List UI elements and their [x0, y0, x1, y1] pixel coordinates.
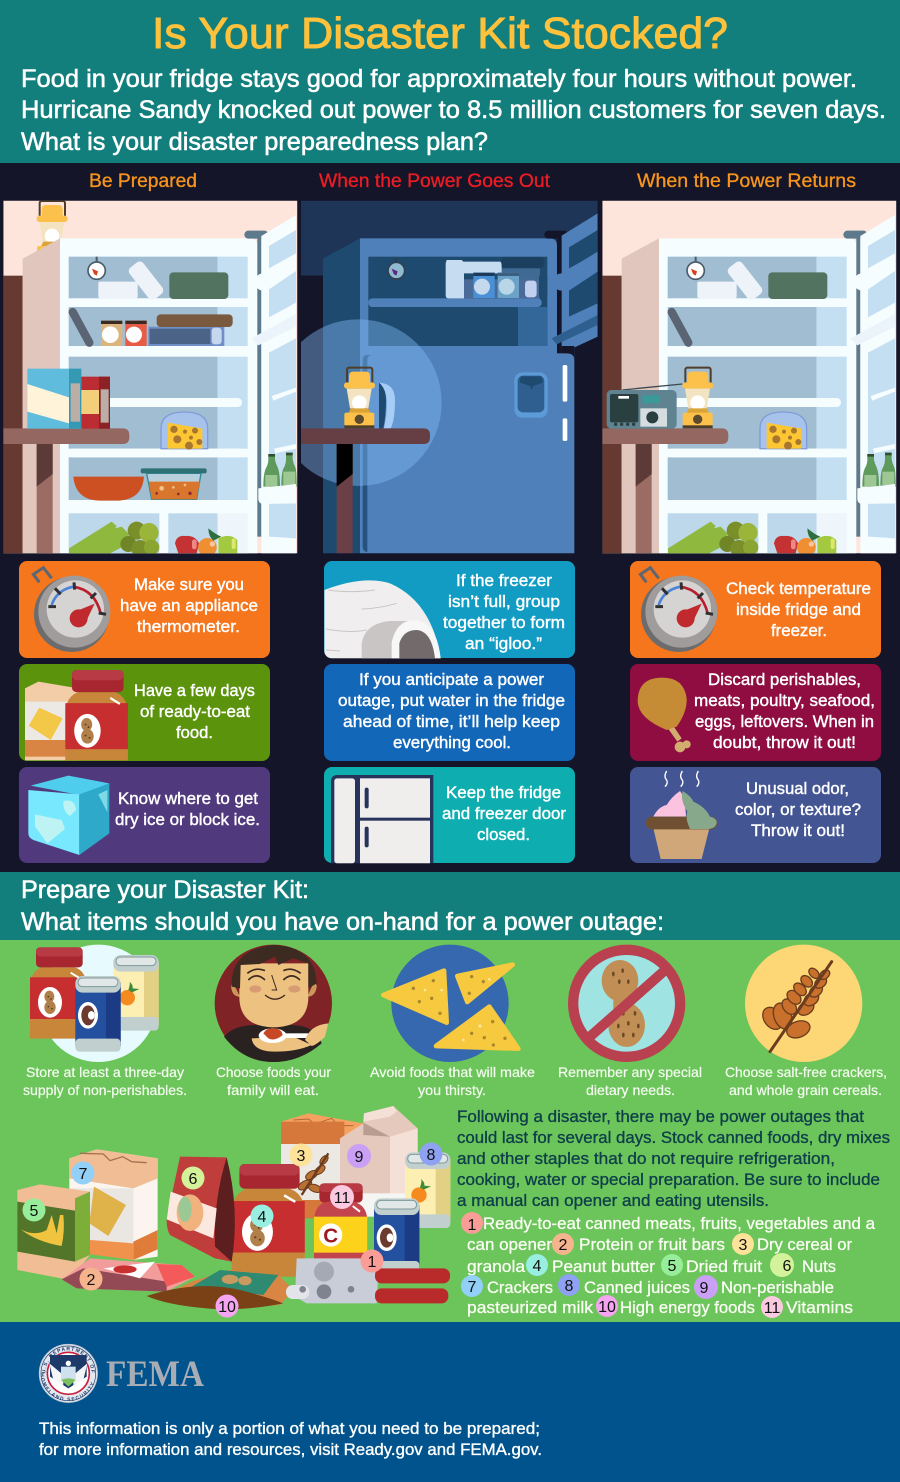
- logo: FEMA: FEMA: [106, 1354, 204, 1395]
- card: unusual odor: color, or texture?: [735, 801, 861, 819]
- card: ready-to-eat food: Have a few days: [134, 682, 255, 700]
- item: milk carton: [340, 1106, 418, 1217]
- badges on kit items: [22, 1142, 442, 1318]
- text block: kit description: [457, 1107, 890, 1210]
- legend: kit items key: 1: [468, 1217, 477, 1234]
- card: keep door closed: Keep the fridge: [446, 784, 561, 802]
- icon: non-perishables: [30, 945, 159, 1062]
- illustration: stocked fridge open: [3, 201, 297, 557]
- panel: tip cards column 1: [19, 561, 270, 863]
- item: crackers box: [69, 1149, 158, 1260]
- card: ready-to-eat food: of ready-to-eat: [140, 703, 250, 721]
- badges on kit items: 7: [79, 1166, 88, 1183]
- icon: salty chips: [383, 945, 518, 1062]
- intro text: Food in your fridge stays good for approximately four hours without power.: [21, 65, 857, 93]
- card: check temperature: Check temperature: [726, 580, 871, 598]
- badges on kit items: 10: [218, 1299, 236, 1316]
- badges on kit items: 1: [368, 1254, 377, 1271]
- card: check temperature: freezer.: [771, 622, 827, 640]
- card: discard perishables: doubt, throw it out!: [713, 734, 856, 752]
- card: discard perishables: eggs, leftovers. When in: [695, 713, 874, 731]
- card: check temperature: inside fridge and: [736, 601, 861, 619]
- item: peanut butter jar: [232, 1164, 305, 1277]
- card: unusual odor: Unusual odor,: [746, 780, 849, 798]
- card: dry ice: [19, 767, 270, 863]
- panel: tip cards column 3: [630, 561, 881, 863]
- intro text: [21, 65, 886, 156]
- icon: radio: [607, 384, 682, 429]
- illustration: dark fridge during outage: [275, 201, 598, 553]
- title: Is Your Disaster Kit Stocked?: [152, 9, 728, 58]
- item: can opener: [286, 1258, 450, 1303]
- legend: kit items key: 11: [764, 1300, 780, 1317]
- card: put water in fridge: everything cool.: [393, 734, 511, 752]
- footer text: This information is only a portion of what you need to be prepared;: [39, 1420, 540, 1438]
- captions: you thirsty.: [418, 1082, 486, 1098]
- legend: kit items key: 3: [739, 1237, 748, 1254]
- card: appliance thermometer: [19, 561, 270, 658]
- item: wheat: [297, 1153, 330, 1195]
- legend: kit items key: High energy foods: [620, 1298, 755, 1317]
- illustration: fridge after power returns: [602, 201, 896, 557]
- captions: dietary needs.: [586, 1082, 675, 1098]
- captions: Avoid foods that will make: [370, 1064, 535, 1080]
- section heading: prepare your disaster kit: [21, 876, 664, 936]
- card: appliance thermometer: thermometer.: [137, 618, 240, 636]
- captions: Remember any special: [558, 1064, 702, 1080]
- card: ready-to-eat food: food.: [176, 724, 213, 742]
- card: put water in fridge: If you anticipate a power: [359, 671, 545, 689]
- card: dry ice: dry ice or block ice.: [115, 811, 260, 829]
- item: vitamins: C: [323, 1224, 338, 1247]
- card: igloo: isn’t full, group: [448, 593, 560, 611]
- heading: When the Power Goes Out: When the Power Goes Out: [319, 170, 551, 192]
- intro text: Hurricane Sandy knocked out power to 8.5 million customers for seven days.: [21, 96, 886, 124]
- legend: kit items key: 4: [533, 1258, 542, 1275]
- captions: Choose foods your: [216, 1064, 331, 1080]
- footer text: for more information and resources, visit Ready.gov and FEMA.gov.: [39, 1441, 542, 1459]
- card: discard perishables: Discard perishables,: [708, 671, 861, 689]
- card: igloo: [324, 561, 575, 658]
- legend: kit items key: Crackers: [487, 1278, 553, 1297]
- item: cereal box: [281, 1113, 363, 1218]
- icon: no peanuts: [568, 945, 685, 1062]
- badges on kit items: 4: [258, 1209, 267, 1226]
- legend: kit items key: granola: [467, 1257, 526, 1276]
- badges on kit items: 5: [30, 1203, 39, 1220]
- card: put water in fridge: [324, 664, 575, 761]
- legend: kit items key: 9: [700, 1280, 709, 1297]
- badges on kit items: 2: [87, 1272, 96, 1289]
- badges on kit items: 9: [355, 1149, 364, 1166]
- intro text: What is your disaster preparedness plan?: [21, 128, 488, 156]
- icon: DHS seal: HOMELAND SECURITY: [40, 1373, 94, 1401]
- item: juice can: [405, 1152, 450, 1228]
- text block: kit description: and other staples that do not require refrigeration,: [457, 1149, 835, 1168]
- section heading: prepare your disaster kit: What items should you have on-hand for a power outage:: [21, 908, 664, 936]
- icon: DHS seal: U.S. DEPARTMENT OF: [42, 1346, 95, 1373]
- panel: kit tips icons: [23, 945, 887, 1098]
- badges on kit items: 8: [427, 1147, 436, 1164]
- card: unusual odor: [630, 767, 881, 863]
- legend: kit items key: 6: [783, 1258, 792, 1275]
- legend: kit items key: Peanut butter: [552, 1257, 655, 1276]
- captions: Choose salt-free crackers,: [725, 1064, 887, 1080]
- legend: kit items key: Dried fruit: [686, 1257, 762, 1276]
- text block: kit description: cooking, water or special preparation. Be sure to include: [457, 1170, 880, 1189]
- card: put water in fridge: ahead of time, it’ll help keep: [343, 713, 560, 731]
- captions: Store at least a three-day: [26, 1064, 184, 1080]
- legend: kit items key: Protein or fruit bars: [579, 1235, 725, 1254]
- captions: and whole grain cereals.: [729, 1082, 882, 1098]
- legend: kit items key: Nuts: [802, 1257, 836, 1276]
- legend: kit items key: Vitamins: [786, 1298, 853, 1317]
- card: igloo: an “igloo.”: [465, 635, 542, 653]
- card: keep door closed: closed.: [477, 826, 530, 844]
- item: high energy food: [147, 1270, 293, 1309]
- badges on kit items: 6: [189, 1171, 198, 1188]
- legend: kit items key: can opener: [467, 1235, 552, 1254]
- icon: whole grain: [745, 945, 862, 1062]
- legend: kit items key: Canned juices: [584, 1278, 690, 1297]
- legend: kit items key: Ready-to-eat canned meats, fruits, vegetables and a: [483, 1214, 876, 1233]
- icon: DHS seal: [38, 1344, 98, 1403]
- legend: kit items key: 7: [468, 1279, 477, 1296]
- badges on kit items: 3: [297, 1148, 306, 1165]
- card: unusual odor: Throw it out!: [751, 822, 845, 840]
- captions: supply of non-perishables.: [23, 1082, 187, 1098]
- text block: kit description: could last for several days. Stock canned foods, dry mixes: [457, 1128, 890, 1147]
- card: discard perishables: meats, poultry, seafood,: [694, 692, 875, 710]
- section heading: prepare your disaster kit: Prepare your Disaster Kit:: [21, 876, 309, 904]
- text block: kit description: Following a disaster, there may be power outages that: [457, 1107, 864, 1126]
- card: ready-to-eat food: [19, 664, 270, 771]
- illustration: disaster kit items: [17, 1106, 450, 1309]
- card: put water in fridge: outage, put water in the fridge: [338, 692, 565, 710]
- item: bean can: [374, 1198, 419, 1274]
- card: keep door closed: and freezer door: [442, 805, 567, 823]
- legend: kit items key: 5: [668, 1258, 677, 1275]
- card: check temperature: [630, 561, 881, 658]
- captions: [23, 1064, 887, 1098]
- panel: tip cards column 2: [324, 561, 575, 863]
- legend: kit items key: [461, 1212, 876, 1318]
- legend: kit items key: 10: [598, 1299, 616, 1316]
- legend: kit items key: Non-perishable: [721, 1278, 834, 1297]
- card: keep door closed: [324, 767, 575, 863]
- heading: When the Power Returns: When the Power Returns: [637, 170, 856, 192]
- footer text: [39, 1420, 542, 1459]
- legend: kit items key: 2: [559, 1237, 568, 1254]
- legend: kit items key: Dry cereal or: [757, 1235, 852, 1254]
- badges on kit items: 11: [334, 1190, 350, 1207]
- icon: lantern: [682, 368, 713, 428]
- card: discard perishables: [630, 664, 881, 761]
- legend: kit items key: pasteurized milk: [467, 1298, 594, 1317]
- item: vitamins: [314, 1183, 367, 1259]
- item: protein bar: [62, 1258, 195, 1292]
- legend: kit items key: 8: [565, 1278, 574, 1295]
- card: appliance thermometer: have an appliance: [120, 597, 258, 615]
- card: igloo: together to form: [443, 614, 565, 632]
- text block: kit description: a manual can opener and eating utensils.: [457, 1191, 769, 1210]
- item: nuts bag: [167, 1157, 235, 1262]
- icon: family eating: [215, 945, 332, 1062]
- captions: family will eat.: [227, 1082, 319, 1098]
- card: igloo: If the freezer: [456, 572, 553, 590]
- card: appliance thermometer: Make sure you: [134, 576, 244, 594]
- card: dry ice: Know where to get: [118, 790, 258, 808]
- item: dried fruit box: [17, 1184, 90, 1280]
- heading: Be Prepared: Be Prepared: [89, 170, 197, 192]
